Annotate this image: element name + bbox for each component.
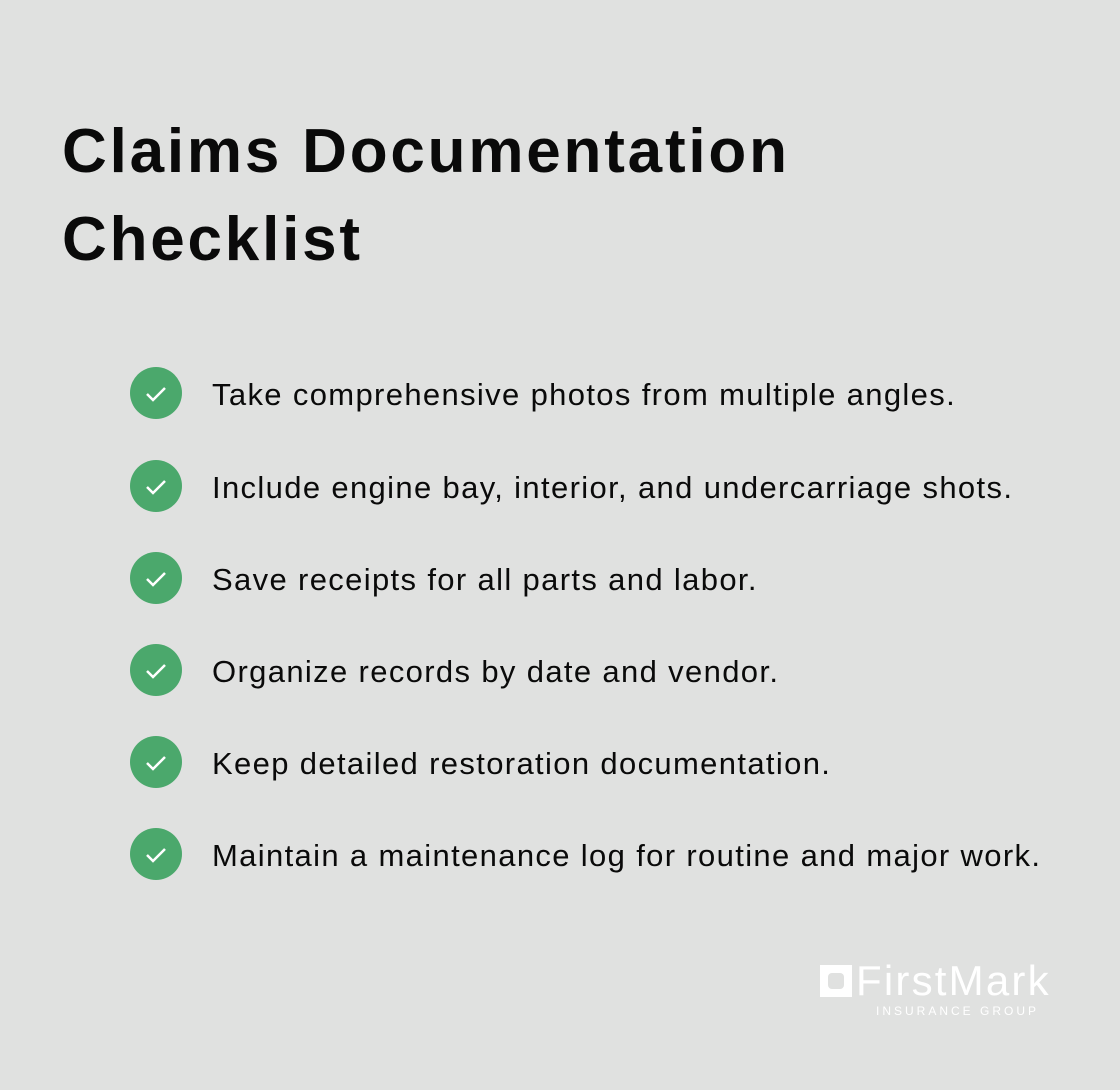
checklist item 5 — [130, 736, 831, 788]
checklist item 6 — [130, 828, 1041, 880]
checklist item 4 — [130, 644, 779, 696]
logo: INSURANCE GROUP — [876, 1004, 1039, 1018]
logo — [820, 957, 1051, 1018]
checklist item 3: Save receipts for all parts and labor. — [212, 562, 758, 597]
checklist item 2 — [130, 460, 1013, 512]
checklist item 1 — [130, 367, 956, 419]
checklist item 3 — [130, 552, 758, 604]
checklist item 1: Take comprehensive photos from multiple angles. — [212, 377, 956, 412]
checklist item 2: Include engine bay, interior, and undercarriage shots. — [212, 470, 1013, 505]
checklist item 4: Organize records by date and vendor. — [212, 654, 779, 689]
title: Claims Documentation — [62, 117, 790, 186]
title — [62, 117, 790, 274]
checklist item 5: Keep detailed restoration documentation. — [212, 746, 831, 781]
logo: FirstMark — [856, 957, 1051, 1004]
checklist item 6: Maintain a maintenance log for routine and major work. — [212, 838, 1041, 873]
title: Checklist — [62, 205, 363, 274]
